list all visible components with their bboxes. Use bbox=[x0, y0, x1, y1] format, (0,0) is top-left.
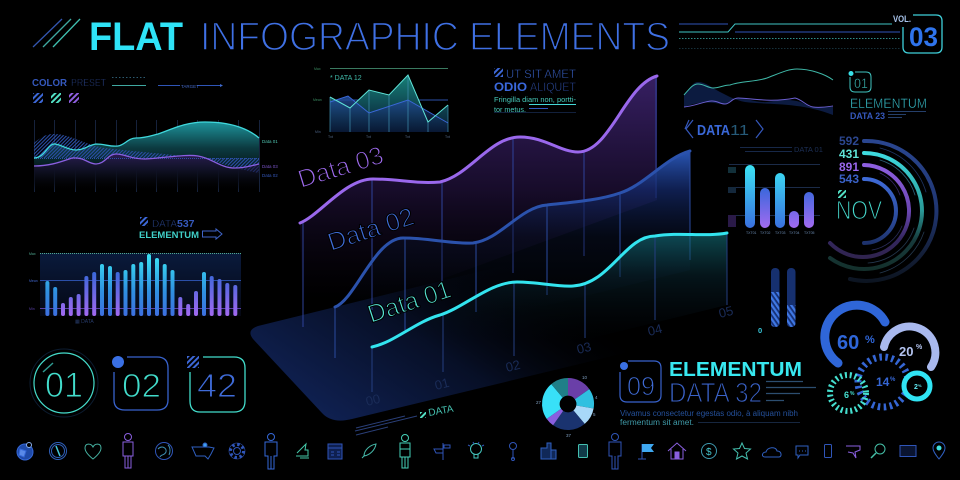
icon: key bbox=[510, 442, 516, 460]
icon: megaphone bbox=[846, 446, 860, 458]
series: data 02 bbox=[324, 151, 690, 358]
panel: vertical bar chart: TXT03 bbox=[775, 231, 786, 235]
text block: ut sit amet: tor metus. bbox=[494, 105, 526, 114]
radial chart: nov: NOV bbox=[836, 195, 883, 225]
icon: compass bbox=[50, 442, 66, 460]
panel: vertical bar chart bbox=[728, 145, 823, 235]
axis labels: 02 bbox=[504, 357, 522, 375]
pie chart: 5 bbox=[593, 412, 596, 417]
donut: 6%: 6 bbox=[844, 390, 849, 400]
pie chart: 10 bbox=[582, 375, 588, 380]
donut: 60%: 60 bbox=[837, 332, 859, 354]
badge: 42 bbox=[187, 356, 245, 412]
radial chart: nov: 891 bbox=[839, 160, 859, 174]
axis labels: 01 bbox=[433, 375, 451, 393]
data caption: DATA bbox=[428, 404, 455, 419]
donut: 14%: % bbox=[890, 377, 896, 383]
series: data 01: Data 01 bbox=[364, 276, 455, 329]
donut: 60%: % bbox=[865, 334, 875, 346]
panel: data537 bar chart: Mean bbox=[29, 279, 38, 283]
series: data 01 bbox=[364, 233, 727, 392]
badge: 01 bbox=[30, 349, 98, 417]
badge: 01: 01 bbox=[45, 366, 83, 405]
elementum data 23: DATA 23 bbox=[850, 111, 885, 121]
heading: data11 bbox=[685, 120, 763, 139]
main chart: stacked wave areas bbox=[250, 76, 770, 435]
heading: color preset bbox=[32, 77, 223, 103]
radial chart: nov bbox=[830, 134, 936, 281]
heading: data537 bbox=[139, 217, 222, 240]
elementum data 23 bbox=[848, 71, 927, 121]
icon: woman teal bbox=[400, 434, 410, 468]
icon: usa map bbox=[192, 443, 214, 459]
axis labels: 04 bbox=[646, 321, 664, 339]
donut: 2% bbox=[904, 373, 930, 399]
radial chart: nov: 431 bbox=[839, 147, 859, 161]
panel: color preset line chart: Data 02 bbox=[262, 173, 278, 178]
badge: 02 bbox=[112, 356, 168, 410]
panel: elementum data 32: 09 bbox=[627, 371, 655, 401]
axis labels: 05 bbox=[717, 303, 735, 321]
heading: data11: DATA bbox=[697, 122, 730, 139]
icon: title slashes bbox=[33, 19, 80, 47]
panel: color preset line chart: Data 03 bbox=[262, 164, 278, 169]
heading: color preset: COLOR bbox=[32, 77, 67, 89]
icon: signpost bbox=[434, 443, 450, 460]
donut: 14% bbox=[858, 357, 908, 407]
platform bbox=[250, 200, 770, 421]
panel: vertical bar chart: DATA 01 bbox=[794, 145, 823, 154]
mini area chart bbox=[684, 69, 833, 115]
icon: gear bbox=[229, 443, 245, 459]
axis labels: 03 bbox=[575, 339, 593, 357]
progress bars bbox=[758, 268, 796, 335]
donut: 6%: % bbox=[850, 391, 855, 397]
icon: man blue bbox=[265, 434, 277, 469]
icon: cloud bbox=[762, 448, 781, 457]
icon: globe outline bbox=[156, 442, 172, 460]
panel: color preset line chart: Data 01 bbox=[262, 139, 278, 144]
text block: ut sit amet: UT SIT AMET bbox=[506, 69, 576, 81]
badge: 02: 02 bbox=[122, 367, 161, 404]
series: data 03: Data 03 bbox=[295, 141, 387, 194]
donut: 2%: 2 bbox=[914, 384, 918, 391]
heading: data11: 11 bbox=[730, 122, 749, 139]
donut: 20% bbox=[884, 327, 935, 367]
heading: color preset: PRESET bbox=[71, 77, 106, 89]
panel: color preset line chart bbox=[32, 77, 278, 192]
pie chart: 27 bbox=[536, 400, 542, 405]
panel: elementum data 32: ELEMENTUM bbox=[669, 359, 802, 381]
panel: elementum data 32: Vivamus consectetur egestas odio, à aliquam nibh bbox=[620, 409, 798, 418]
icon: globe pin bbox=[17, 442, 33, 460]
axis labels bbox=[364, 303, 735, 409]
panel: data537 bar chart: Min bbox=[29, 307, 35, 311]
volume badge: 03 bbox=[909, 22, 938, 52]
panel: data 12 chart: Mean bbox=[313, 98, 322, 102]
series: data 03 bbox=[295, 76, 657, 330]
progress bars: 0 bbox=[758, 326, 762, 335]
text block: ut sit amet: ALIQUET bbox=[530, 82, 576, 94]
donut: 20%: 20 bbox=[899, 344, 913, 359]
panel: elementum data 32: fermentum sit amet. bbox=[620, 418, 694, 427]
radial chart: nov: 543 bbox=[839, 172, 859, 186]
title: FLAT bbox=[89, 15, 183, 59]
panel: data 12 chart: Txt bbox=[366, 135, 371, 139]
title: INFOGRAPHIC ELEMENTS bbox=[200, 15, 670, 59]
donut: 2%: % bbox=[918, 383, 922, 388]
panel: vertical bar chart: TXT04 bbox=[789, 231, 800, 235]
icon: star bbox=[734, 443, 750, 459]
title bbox=[33, 15, 670, 59]
icon: storefront bbox=[328, 444, 342, 459]
icon: chat bbox=[796, 446, 808, 458]
radial chart: nov: 592 bbox=[839, 134, 859, 148]
icon: magnifier bbox=[871, 444, 885, 458]
icon: phone bbox=[824, 444, 832, 458]
icon: woman purple bbox=[123, 434, 133, 468]
heading: data537: ELEMENTUM bbox=[139, 230, 199, 240]
icon: buildings bbox=[541, 443, 556, 459]
icon: light bulb bbox=[468, 442, 484, 458]
panel: data 12 chart: Txt bbox=[328, 135, 333, 139]
panel: data 12 chart: Txt bbox=[445, 135, 450, 139]
panel: vertical bar chart: TXT02 bbox=[760, 231, 771, 235]
icon: map pin bbox=[933, 442, 945, 459]
icon: hand bbox=[296, 444, 309, 458]
icon: man navy bbox=[609, 434, 621, 469]
panel: vertical bar chart: TXT05 bbox=[804, 231, 815, 235]
icon: house bbox=[668, 443, 686, 459]
donut: 6% bbox=[830, 375, 866, 411]
elementum data 23: ELEMENTUM bbox=[850, 96, 927, 111]
panel: data 12 chart bbox=[313, 67, 450, 139]
data caption bbox=[355, 404, 455, 435]
panel: data537 bar chart: Max bbox=[29, 252, 36, 256]
axis labels: 00 bbox=[364, 391, 382, 409]
icon: flag bbox=[638, 444, 654, 459]
panel: data 12 chart: Txt bbox=[405, 135, 410, 139]
volume badge bbox=[679, 14, 942, 53]
icon: heart bbox=[85, 444, 101, 459]
panel: vertical bar chart: TXT01 bbox=[746, 231, 757, 235]
icon: laptop screen bbox=[900, 446, 916, 456]
icon row: $ bbox=[706, 447, 712, 458]
volume badge: VOL. bbox=[893, 14, 911, 24]
pie chart bbox=[536, 375, 598, 438]
panel: data 12 chart: * DATA 12 bbox=[330, 75, 362, 82]
panel: elementum data 32: DATA 32 bbox=[669, 377, 762, 408]
heading: data537: DATA bbox=[152, 218, 177, 230]
heading: color preset: TARGET bbox=[181, 84, 199, 89]
pie chart: 4 bbox=[595, 395, 598, 400]
icon: dollar coin bbox=[702, 444, 716, 458]
donut: 20%: % bbox=[916, 344, 923, 351]
panel: elementum data 32 bbox=[620, 359, 816, 427]
panel: data537 bar chart: ▦ DATA bbox=[75, 319, 94, 325]
pie chart: 37 bbox=[566, 433, 572, 438]
text block: ut sit amet: Fringilla diam non, portti- bbox=[494, 95, 576, 104]
series: data 02: Data 02 bbox=[324, 203, 417, 257]
donut: 60% bbox=[825, 305, 885, 363]
icon: tablet bbox=[578, 444, 588, 458]
text block: ut sit amet: ODIO bbox=[494, 82, 527, 94]
panel: data537 bar chart bbox=[29, 217, 241, 325]
bars bbox=[47, 256, 235, 314]
panel: data 12 chart: Max bbox=[314, 67, 321, 71]
heading: data537: 537 bbox=[177, 218, 195, 230]
icon row bbox=[17, 434, 945, 469]
elementum data 23: 01 bbox=[854, 75, 868, 91]
icon: rocket bbox=[362, 444, 376, 458]
text block: ut sit amet bbox=[494, 68, 576, 114]
panel: data 12 chart: Min bbox=[315, 130, 321, 134]
donut: 14%: 14 bbox=[876, 375, 890, 389]
badge: 42: 42 bbox=[197, 367, 237, 404]
